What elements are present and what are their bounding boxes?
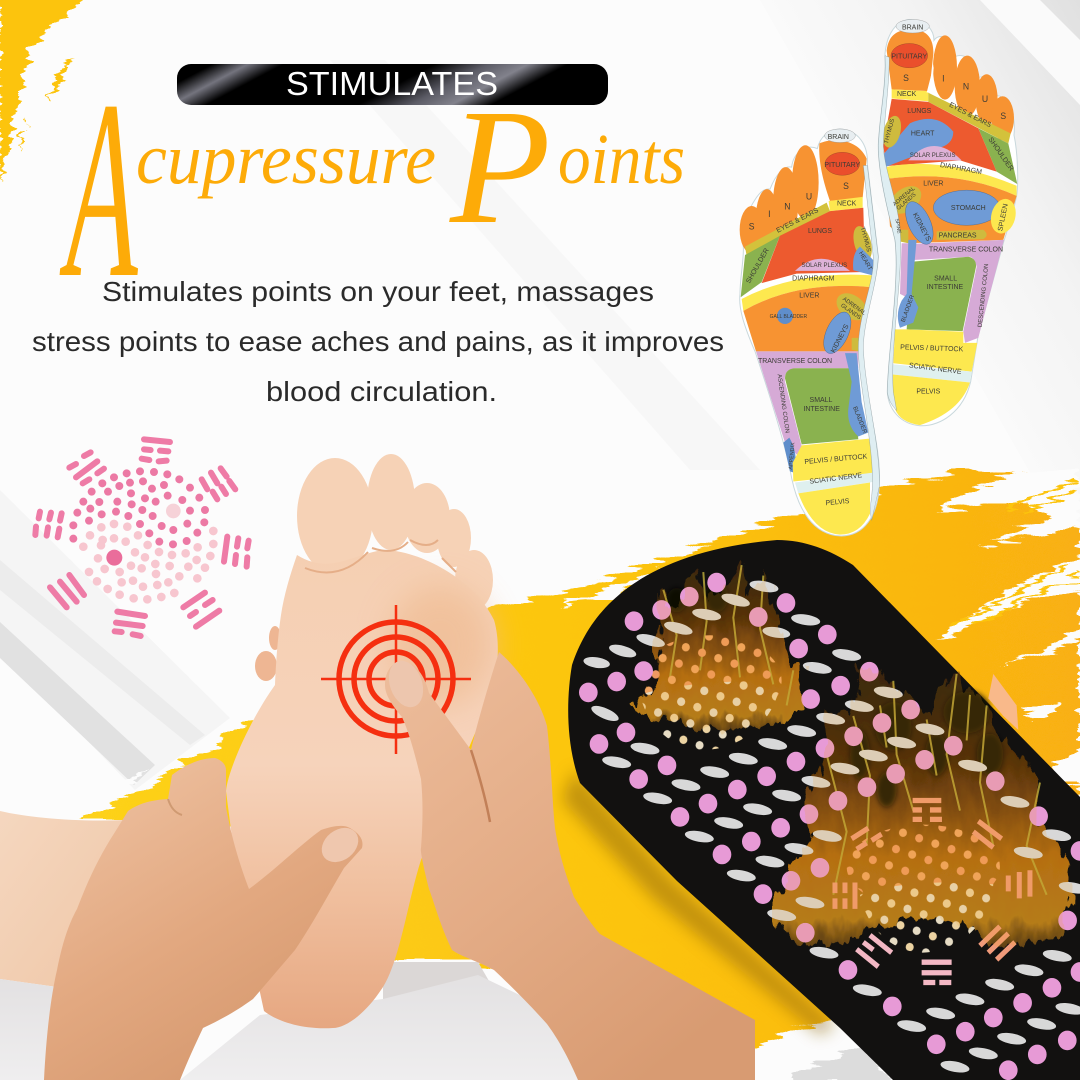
labels: right foot: DIAPHRAGM (939, 162, 982, 176)
labels: right foot: SPINE (893, 218, 902, 235)
brush stroke: top left (0, 0, 82, 182)
towel: left part (0, 979, 150, 1080)
labels: left foot: LUNGS (808, 228, 832, 235)
labels: left foot: THYMUS (859, 226, 871, 253)
labels: right foot: S (1000, 111, 1006, 121)
labels: right foot: DESCENDING COLON (978, 263, 990, 328)
chart: right foot (878, 19, 1019, 426)
labels: right foot: LIVER (923, 181, 943, 188)
labels: right foot: S (903, 73, 909, 83)
labels: right foot: U (982, 94, 988, 104)
icon: red target (321, 605, 471, 754)
labels: left foot: SCIATIC NERVE (809, 472, 863, 486)
labels: left foot: HEART (857, 251, 873, 272)
labels: right foot: NECK (897, 91, 917, 98)
labels: right foot: SMALL (934, 275, 957, 282)
labels: left foot: BLADDER (851, 406, 868, 435)
title: A (59, 48, 138, 330)
labels: right foot: TRANSVERSE COLON (929, 247, 1003, 254)
photo: foot sole (226, 454, 498, 1028)
labels: left foot: EYES & EARS (775, 207, 820, 235)
labels: left foot: SOLAR PLEXUS (802, 263, 847, 269)
labels: right foot: SPLEEN (997, 203, 1010, 232)
body text: Stimulates points on your feet, massages (102, 276, 654, 307)
labels: left foot: ASCENDING COLON (776, 374, 790, 433)
photo: left hand (44, 758, 365, 1080)
labels: right foot: PANCREAS (939, 232, 977, 239)
labels: right foot: LUNGS (907, 108, 932, 115)
labels: left foot: S (843, 181, 849, 191)
white ovals (583, 579, 1080, 1075)
towel: right part (180, 975, 590, 1080)
labels: left foot: APPENDIX (788, 442, 797, 470)
labels: left foot: PELVIS / BUTTOCK (804, 453, 868, 466)
labels: left foot: ADRENAL (841, 296, 867, 317)
labels: right foot: HEART (911, 131, 935, 138)
icon: acupoint pattern (35, 439, 249, 636)
labels: right foot: ADRENAL (892, 186, 916, 208)
foot: behind fingers (255, 626, 281, 681)
flame: dark gaps (667, 581, 1003, 807)
pressure dots: large cluster (847, 825, 1000, 909)
title: cupressure (136, 119, 436, 199)
towel: back shadow (383, 962, 500, 1010)
trigram bars (835, 800, 1030, 960)
flame: wisps (663, 565, 1047, 895)
foot: sole body (226, 550, 498, 1028)
labels: right foot: PITUITARY (891, 54, 928, 61)
acupoint dots: light (83, 524, 213, 599)
acupoint dots: dark (73, 471, 205, 544)
labels: left foot: GALL BLADDER (770, 314, 807, 320)
trigram bars: white (857, 935, 952, 983)
flame: outside sock (988, 674, 1018, 730)
labels: right foot: PELVIS (916, 389, 941, 396)
sock shadow (562, 770, 835, 1035)
labels: right foot: PELVIS / BUTTOCK (900, 344, 964, 354)
labels: right foot: KIDNEYS (911, 212, 932, 243)
labels: left foot: S (749, 222, 755, 232)
labels: left foot: PITUITARY (824, 162, 861, 169)
flame: tint overlay large (773, 665, 1072, 947)
labels: right foot: STOMACH (951, 205, 986, 212)
labels: left foot: SMALL (810, 397, 833, 404)
labels: right foot: SHOULDER (987, 136, 1015, 173)
title: P (449, 75, 551, 258)
labels: left foot: I (768, 209, 771, 219)
labels: right foot: SOLAR PLEXUS (910, 153, 955, 159)
title: oints (558, 119, 685, 199)
hand: thumb crease (471, 750, 490, 822)
labels: left foot: NECK (837, 200, 857, 207)
labels: right foot: BLADDER (901, 294, 916, 323)
labels: left foot: DIAPHRAGM (792, 275, 835, 282)
labels: right foot: INTESTINE (927, 284, 964, 291)
labels: left foot: LIVER (799, 292, 819, 299)
labels: left foot: SHOULDER (745, 247, 771, 285)
hand: thumb nail (383, 656, 429, 712)
labels: left foot: TRANSVERSE COLON (758, 358, 832, 365)
flame: tint overlay (635, 563, 803, 730)
pressure dots: small cluster lower (640, 682, 780, 750)
labels: left foot: KIDNEYS (830, 323, 851, 354)
labels: right foot: N (963, 81, 969, 91)
pressure dots: large cluster lower (860, 882, 993, 953)
sock body (568, 540, 1080, 1080)
sock (568, 540, 1080, 1080)
pink dots (588, 583, 1080, 1070)
labels: right foot (884, 25, 1015, 396)
labels: right foot: EYES & EARS (948, 102, 992, 129)
body text (32, 276, 724, 407)
hand: thumb nail (315, 821, 365, 869)
labels: left foot: BRAIN (828, 134, 849, 141)
body text: blood circulation. (266, 376, 497, 407)
foot: toe creases (305, 540, 456, 572)
labels: right foot: I (942, 74, 945, 84)
labels: right foot: GLANDS (896, 192, 918, 212)
foot: toes (297, 454, 493, 610)
photo: towel (0, 962, 590, 1080)
foot: ball of foot (388, 585, 492, 705)
pressure dots: small cluster (638, 635, 782, 726)
acupoint bars (35, 439, 249, 636)
flame: small cluster (635, 563, 803, 730)
labels: left foot: GLANDS (839, 303, 862, 321)
title (59, 48, 685, 330)
sock dots and flames (583, 563, 1080, 1075)
labels: left foot: U (806, 191, 812, 201)
flame: large cluster (773, 665, 1072, 947)
labels: left foot (745, 134, 873, 507)
labels: left foot: PELVIS (825, 498, 850, 507)
pill banner (177, 64, 608, 105)
labels: left foot: INTESTINE (803, 406, 840, 413)
photo: left arm (0, 811, 130, 990)
labels: right foot: THYMUS (884, 118, 896, 145)
hand: knuckle crease (168, 799, 182, 815)
photo: right hand (383, 652, 755, 1080)
labels: right foot: BRAIN (902, 25, 923, 32)
brush stroke: yellow band (80, 465, 1080, 1080)
labels: left foot: N (784, 201, 790, 211)
labels: right foot: SCIATIC NERVE (908, 362, 962, 376)
body text: stress points to ease aches and pains, as it improves (32, 326, 724, 357)
pill banner: STIMULATES (286, 65, 498, 102)
chart: left foot (740, 129, 880, 536)
foot reflexology charts (740, 19, 1019, 536)
